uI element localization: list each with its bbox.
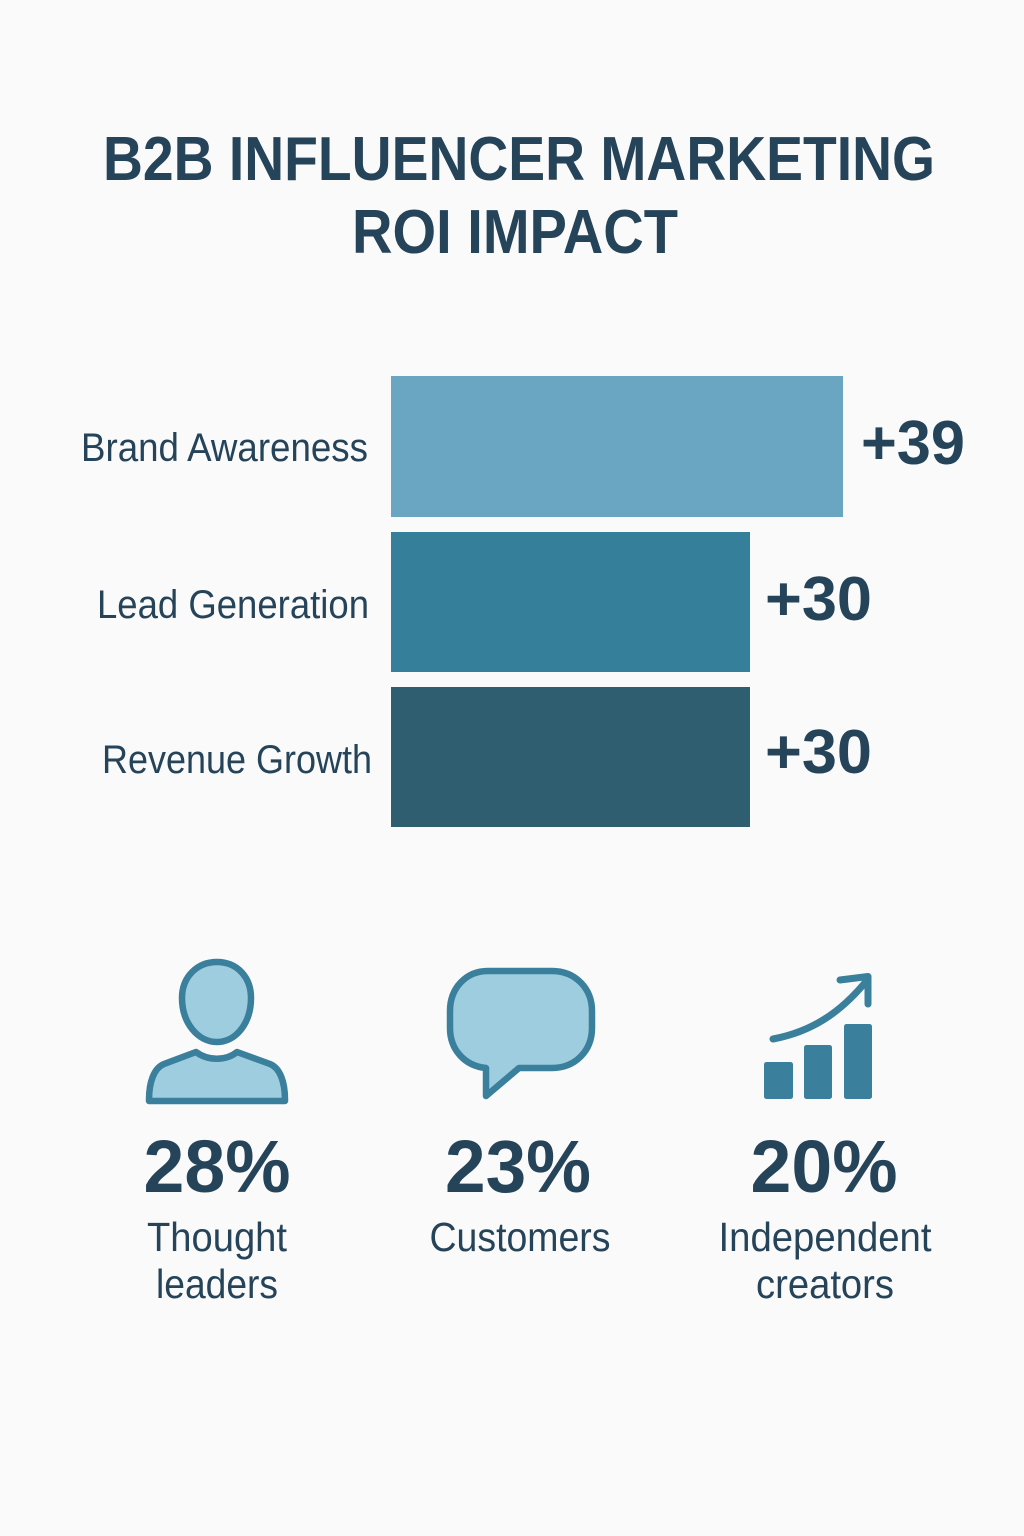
bar row: Brand Awareness: [81, 376, 965, 517]
icon: growth chart: [764, 976, 872, 1099]
bar row: Revenue Growth: [102, 687, 872, 827]
icon: person: [149, 962, 285, 1101]
value: 28%: 28%: [144, 1125, 290, 1208]
label: Thought leaders: leaders: [156, 1261, 278, 1307]
label: Independent creators: Independent: [718, 1214, 932, 1260]
icon: speech bubble: [450, 971, 592, 1096]
value: 20%: 20%: [750, 1125, 898, 1208]
label: Independent creators: creators: [756, 1261, 894, 1307]
bar row: Brand Awareness: +39: [861, 409, 965, 478]
bar row: Lead Generation: Lead Generation: [97, 583, 369, 627]
label: Thought leaders: Thought: [147, 1214, 288, 1260]
title: [103, 125, 935, 267]
bar row: Revenue Growth: +30: [765, 718, 872, 787]
title: B2B INFLUENCER MARKETING: [103, 125, 935, 194]
title: ROI IMPACT: [352, 198, 678, 267]
value: 23%: 23%: [445, 1125, 591, 1208]
bar row: Lead Generation: [97, 532, 872, 672]
bar row: Lead Generation: +30: [765, 565, 872, 634]
bar row: Revenue Growth: Revenue Growth: [102, 738, 372, 782]
label: Independent creators: [718, 1214, 932, 1307]
stat: independent creators: [718, 976, 932, 1307]
label: Thought leaders: [147, 1214, 288, 1307]
bar chart: [81, 376, 965, 827]
label: Customers: Customers: [430, 1214, 610, 1260]
stat: customers: [430, 971, 610, 1260]
stat: thought leaders: [144, 962, 290, 1307]
bar row: Brand Awareness: Brand Awareness: [81, 426, 368, 470]
